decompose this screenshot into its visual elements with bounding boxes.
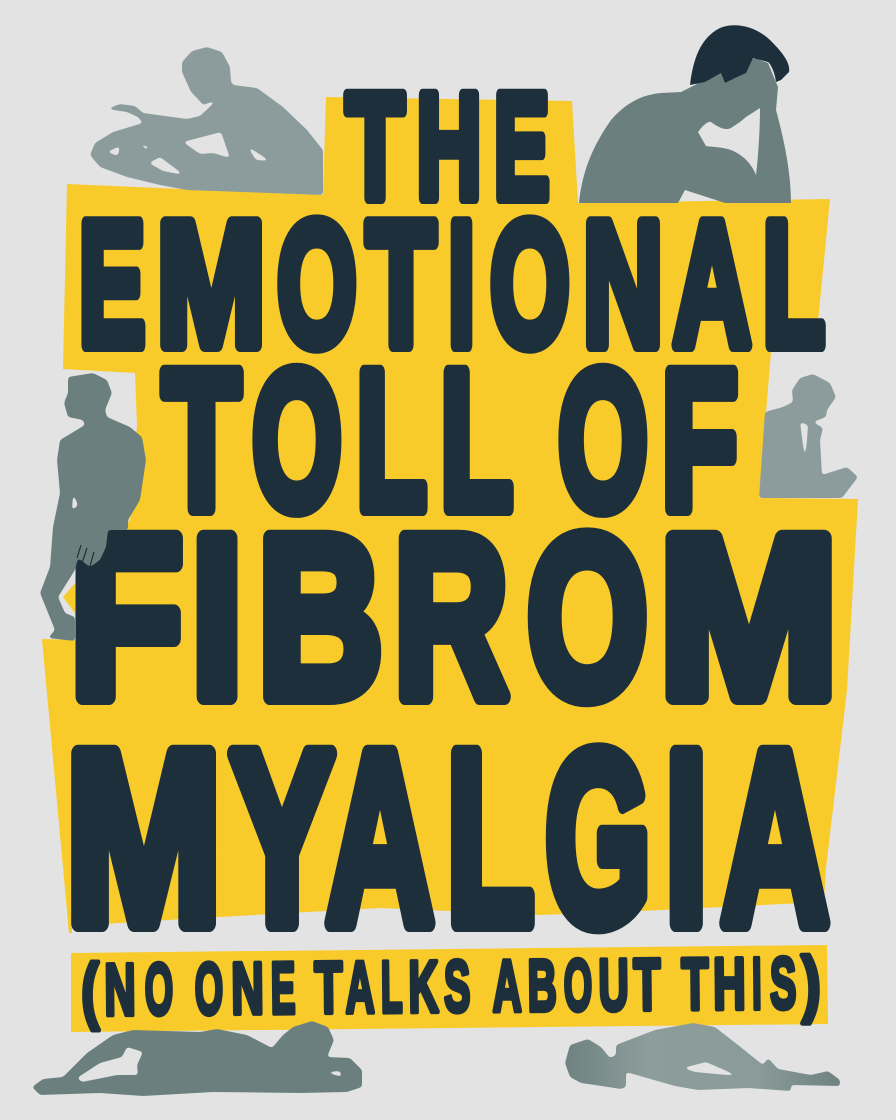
subtitle: U (598, 945, 629, 1026)
subtitle: O (144, 949, 174, 1030)
hair (690, 25, 789, 85)
title line: MYALGIA: L (447, 701, 534, 976)
title line: MYALGIA: A (721, 701, 829, 976)
subtitle: ) (801, 943, 821, 1024)
subtitle: I (752, 944, 762, 1025)
title line: THE: E (494, 62, 550, 230)
title line: EMOTIONAL: O (277, 185, 357, 383)
subtitle: H (713, 944, 746, 1025)
title (66, 62, 838, 976)
title line: EMOTIONAL: E (79, 185, 145, 383)
subtitle: T (633, 944, 661, 1026)
title line: MYALGIA: Y (230, 701, 334, 976)
subtitle: N (104, 950, 136, 1031)
title line: THE: H (416, 62, 482, 230)
title line: EMOTIONAL: A (673, 185, 751, 383)
body (579, 58, 791, 203)
figure: person curled face down, bottom right (565, 1023, 840, 1091)
title line: FIBROM: F (70, 488, 183, 746)
title line: EMOTIONAL: I (448, 185, 475, 383)
title line: TOLL OF: T (163, 330, 240, 550)
title line: MYALGIA: A (326, 701, 434, 976)
title line: EMOTIONAL: N (583, 185, 663, 383)
title line: TOLL OF: O (252, 330, 342, 550)
subtitle: B (527, 945, 557, 1027)
subtitle: O (563, 945, 593, 1026)
subtitle: A (492, 946, 522, 1027)
figure: person lying on side, bottom left (32, 1021, 362, 1096)
figure: person stretching seated, top left (90, 47, 323, 195)
title line: FIBROM: I (191, 488, 243, 746)
title line: THE: T (346, 62, 404, 230)
subtitle: ( (81, 950, 100, 1031)
figure: standing person leaning, left (40, 373, 146, 641)
title line: TOLL OF: F (661, 330, 738, 550)
title line: FIBROM: M (659, 488, 838, 746)
title line: FIBROM: R (394, 488, 508, 746)
title line: EMOTIONAL: T (366, 185, 436, 383)
subtitle: A (345, 947, 375, 1029)
figure: person holding head, top right (579, 25, 791, 203)
subtitle: S (770, 943, 797, 1024)
title line: EMOTIONAL: M (157, 185, 266, 383)
subtitle: T (681, 944, 709, 1025)
title line: TOLL OF: L (356, 330, 427, 550)
title line: MYALGIA: G (545, 701, 651, 976)
title line: MYALGIA: I (665, 701, 708, 976)
title line: MYALGIA: M (66, 701, 222, 976)
yellow title backdrop (42, 97, 858, 933)
title line: TOLL OF: O (558, 330, 648, 550)
subtitle: L (381, 947, 403, 1028)
title line: FIBROM: O (527, 488, 648, 746)
body (40, 373, 146, 641)
subtitle: T (314, 948, 343, 1029)
subtitle: N (231, 948, 264, 1030)
subtitle: K (408, 947, 439, 1028)
subtitle: S (444, 946, 471, 1028)
finger gaps (77, 545, 94, 566)
title line: FIBROM: B (258, 488, 383, 746)
title line: EMOTIONAL: L (763, 185, 825, 383)
yellow subtitle band (71, 945, 828, 1032)
subtitle: O (194, 949, 224, 1030)
subtitle: E (270, 948, 296, 1029)
title line: TOLL OF: L (440, 330, 511, 550)
title line: EMOTIONAL: O (490, 185, 570, 383)
figure: seated thinking person, right (759, 374, 858, 498)
